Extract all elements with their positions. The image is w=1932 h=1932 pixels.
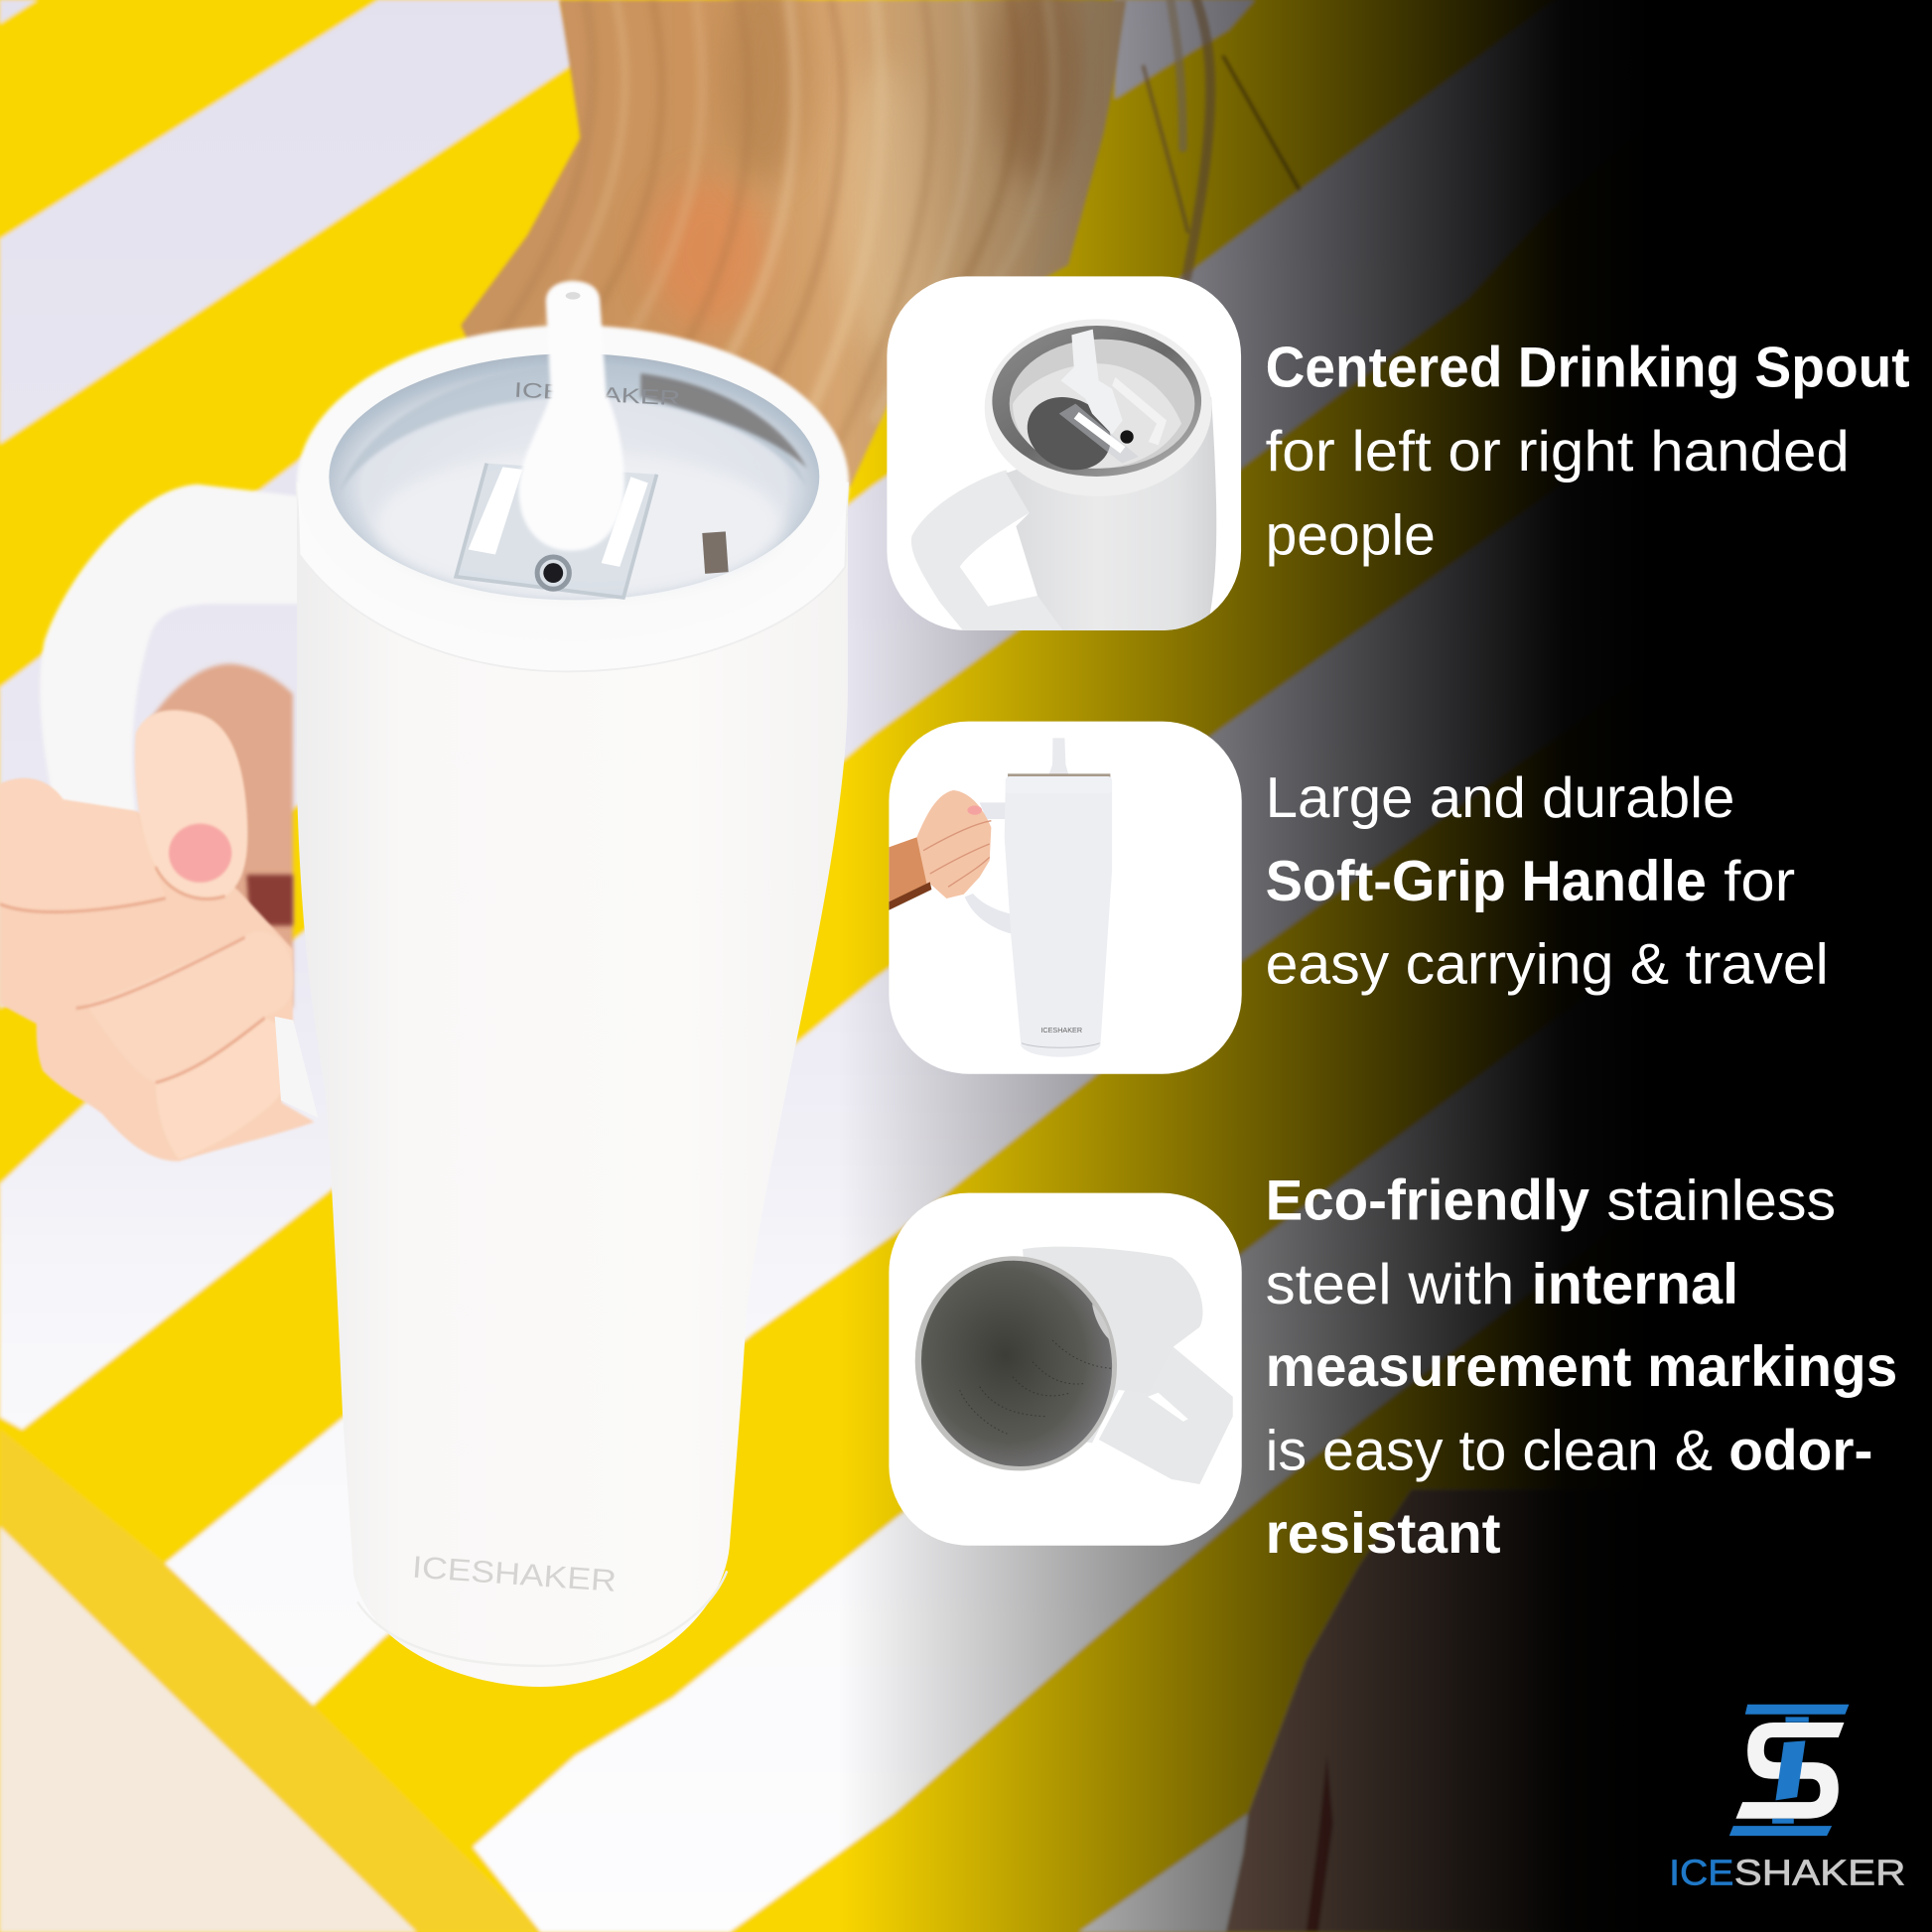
tumbler lid rim	[297, 326, 849, 640]
lid glass	[329, 353, 819, 600]
tumbler lid collar	[297, 483, 848, 671]
feature text: eco-friendly steel: odor-	[1728, 1420, 1872, 1483]
feature text: eco-friendly steel: Eco-friendly	[1266, 1170, 1589, 1233]
feature text: centered drinking spout: for left or right handed	[1266, 420, 1850, 483]
feature text: eco-friendly steel: measurement markings	[1266, 1335, 1897, 1399]
feature text: soft-grip handle: Large and durable	[1266, 766, 1734, 830]
stray hair over towel	[1144, 0, 1299, 277]
tumbler body	[297, 517, 848, 1687]
drinking spout	[518, 281, 624, 551]
Iceshaker logo	[1669, 1705, 1905, 1893]
feature text: soft-grip handle: for	[1724, 850, 1795, 913]
feature text: eco-friendly steel: is easy to clean &	[1266, 1420, 1713, 1483]
feature text: eco-friendly steel	[1266, 1170, 1897, 1566]
feature text: eco-friendly steel: resistant	[1266, 1502, 1501, 1566]
logo wordmark: ICE	[1669, 1853, 1733, 1893]
hand base	[0, 778, 315, 1162]
feature text: soft-grip handle: Soft-Grip Handle	[1266, 850, 1707, 913]
tumbler brand mark: ICESHAKER	[411, 1550, 618, 1598]
thumbnail 2 tumbler	[889, 738, 1112, 1057]
tumbler bottom seam	[357, 1571, 727, 1666]
logo wordmark	[1669, 1853, 1905, 1893]
thumbnail: stainless interior	[889, 1193, 1242, 1546]
feature text: eco-friendly steel: steel with	[1266, 1253, 1514, 1316]
little finger	[156, 1018, 293, 1160]
thumbnail 3 tumbler	[915, 1247, 1233, 1484]
thumbnail: soft-grip handle	[889, 722, 1242, 1074]
embossed lid brand: ICESHAKER	[513, 379, 681, 410]
index finger	[0, 778, 166, 912]
thumb nail	[169, 824, 231, 883]
thumbnail 1 tumbler	[911, 319, 1216, 632]
palm in shadow	[142, 664, 293, 1008]
feature text: eco-friendly steel: stainless	[1606, 1170, 1836, 1233]
hand gripping handle	[0, 664, 315, 1162]
tumbler handle	[40, 484, 302, 813]
finger creases	[0, 867, 265, 1083]
feature text: eco-friendly steel: internal	[1532, 1253, 1738, 1316]
feature text: centered drinking spout: people	[1266, 503, 1436, 567]
thumbnail 2 tumbler: ICESHAKER	[1040, 1026, 1082, 1035]
logo wordmark: SHAKER	[1734, 1853, 1905, 1893]
background photo: blonde hair	[461, 0, 1299, 486]
thumb	[135, 710, 247, 898]
ring finger	[86, 931, 293, 1083]
feature text: centered drinking spout: Centered Drinking Spout	[1266, 337, 1910, 400]
clear slider frame and rails	[456, 464, 656, 598]
feature text: soft-grip handle	[1266, 766, 1829, 996]
feature text: centered drinking spout	[1266, 337, 1910, 567]
hair strands	[492, 0, 1092, 456]
thumbnail: centered spout	[887, 276, 1241, 632]
main tumbler photo	[0, 281, 849, 1687]
feature text: soft-grip handle: easy carrying & travel	[1266, 932, 1829, 996]
lower handle	[275, 1017, 318, 1118]
logo emblem	[1729, 1705, 1849, 1836]
